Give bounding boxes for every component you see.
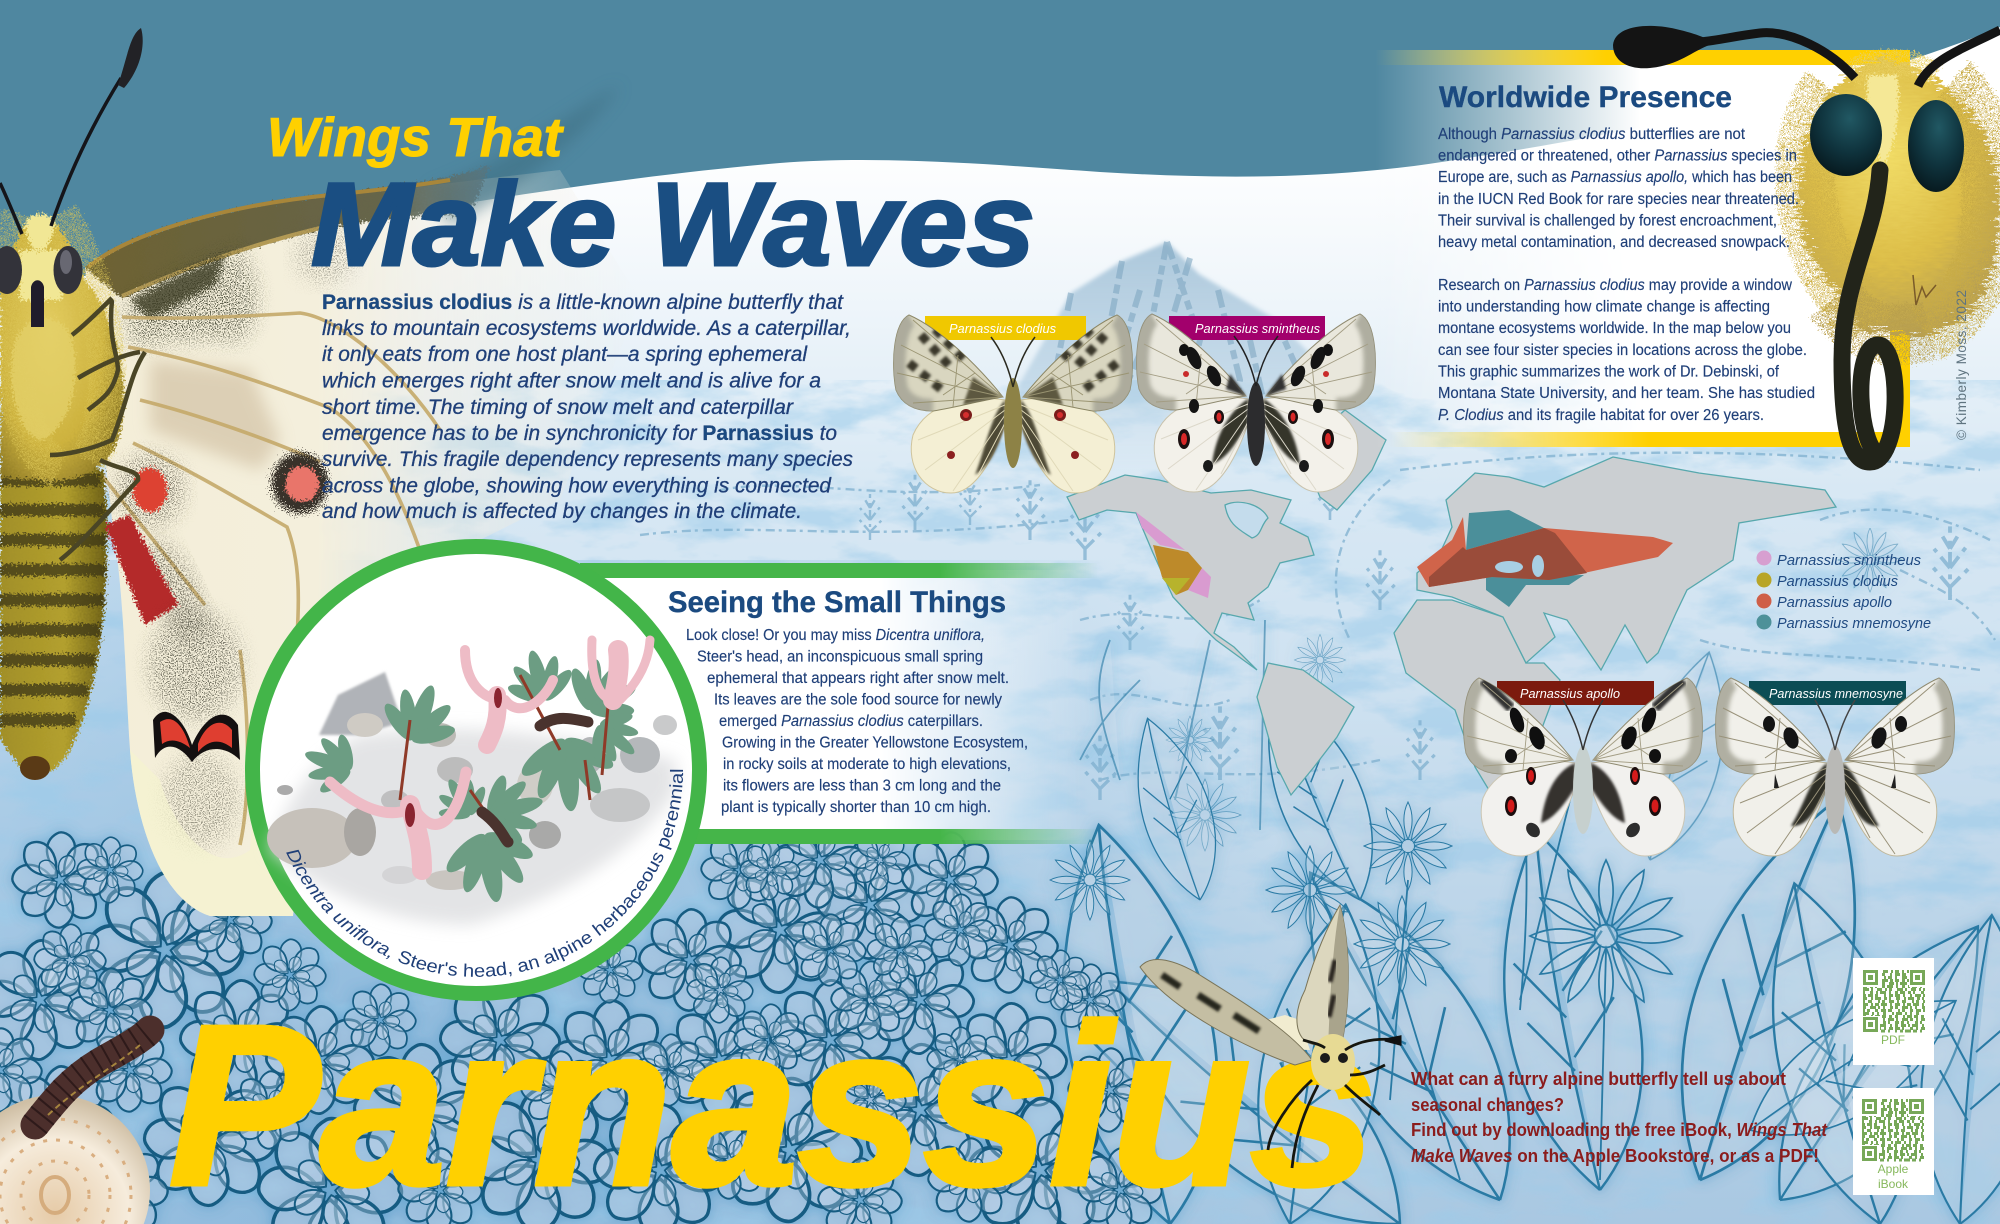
circular caption: Dicentra uniflora, Steer's head, an alpine herbaceous perennial (286, 770, 684, 977)
map legend (1756, 550, 1931, 632)
intro paragraph: emergence has to be in synchronicity for Parnassius to (322, 422, 837, 445)
intro paragraph: Parnassius clodius is a little-known alpine butterfly that (322, 291, 844, 314)
worldwide presence body text: Research on Parnassius clodius may provide a window (1438, 277, 1793, 294)
lower left flower line drawing (0, 812, 1162, 1224)
stems (400, 660, 612, 840)
label text: clodius: Parnassius clodius (949, 321, 1056, 336)
hudson bay (1225, 502, 1268, 538)
caterpillars (482, 718, 588, 842)
eyes (1810, 94, 1882, 176)
worldwide presence body text (1438, 126, 1815, 424)
butterfly: parnassius mnemosyne (1716, 678, 1954, 856)
antennae (0, 28, 143, 234)
intro paragraph: short time. The timing of snow melt and caterpillar (322, 396, 794, 419)
legs (50, 298, 145, 560)
pale upper plants (1080, 528, 1902, 871)
flower throats (405, 688, 502, 827)
call to action text: Make Waves on the Apple Bookstore, or as a PDF! (1411, 1146, 1819, 1166)
antennae (1700, 33, 1855, 78)
butterfly: parnassius clodius (894, 315, 1132, 493)
circle: steer's head illustration (245, 539, 707, 1001)
large butterfly left (0, 28, 640, 916)
qr code: apple ibook: Apple (1878, 1162, 1909, 1176)
leaves (294, 639, 657, 910)
label text: apollo: Parnassius apollo (1520, 686, 1620, 701)
furry butterfly head (1613, 26, 2000, 462)
pink flowers (330, 640, 650, 870)
abdomen (0, 455, 107, 780)
qr code: pdf: PDF (1881, 1033, 1905, 1047)
panel body text: emerged Parnassius clodius caterpillars. (719, 713, 983, 730)
snowy scribbles background (640, 453, 1995, 800)
panel body text: Steer's head, an inconspicuous small spring (697, 648, 983, 666)
africa (1394, 600, 1560, 800)
signature (1913, 275, 1936, 305)
call to action text (1411, 1069, 1828, 1166)
copyright: © Kimberly Moss, 2022 (1954, 290, 1969, 440)
intro paragraph: and how much is affected by changes in the climate. (322, 500, 802, 523)
title: Wings That: Wings That (267, 106, 565, 168)
map legend: Parnassius mnemosyne (1777, 615, 1931, 632)
worldwide presence body text: Although Parnassius clodius butterflies are not (1438, 126, 1746, 143)
worldwide presence body text: in the IUCN Red Book for rare species near threatened. (1438, 191, 1799, 208)
map legend: Parnassius clodius (1777, 573, 1898, 590)
egg and caterpillar bottom left (0, 1030, 150, 1224)
mountain illustration (1000, 242, 1440, 480)
worldwide presence body text: Europe are, such as Parnassius apollo, which has been (1438, 169, 1792, 186)
qr code: apple ibook (1853, 1088, 1934, 1195)
intro paragraph: it only eats from one host plant—a spring ephemeral (322, 343, 808, 366)
qr code: apple ibook: iBook (1878, 1177, 1909, 1191)
panel body text: ephemeral that appears right after snow melt. (707, 670, 1009, 687)
butterfly: parnassius smintheus (1137, 314, 1375, 492)
qr code: pdf (1853, 958, 1934, 1065)
wings (85, 170, 640, 916)
red wing marks (105, 454, 218, 649)
panel body text: its flowers are less than 3 cm long and the (723, 778, 1001, 794)
species ranges on the map (1136, 510, 1673, 607)
eye spot (272, 453, 328, 513)
worldwide presence body text: can see four sister species in locations across the globe. (1438, 342, 1807, 359)
intro paragraph: across the globe, showing how everything is connected (322, 474, 832, 498)
panel body text: Its leaves are the sole food source for newly (714, 692, 1002, 708)
heading: worldwide presence: Worldwide Presence (1439, 81, 1732, 114)
worldwide presence body text: Their survival is challenged by forest encroachment, (1438, 212, 1777, 230)
wing veins (100, 313, 440, 845)
label text: mnemosyne: Parnassius mnemosyne (1769, 686, 1903, 701)
proboscis (1842, 170, 1895, 462)
speckled dark patches (125, 250, 256, 345)
worldwide presence body text: P. Clodius and its fragile habitat for over 26 years. (1438, 407, 1764, 424)
map legend: Parnassius apollo (1777, 594, 1892, 611)
title: Make Waves: Make Waves (311, 159, 1035, 291)
map legend: Parnassius smintheus (1777, 552, 1921, 569)
panel body text: plant is typically shorter than 10 cm high. (721, 799, 991, 816)
label text: smintheus: Parnassius smintheus (1195, 321, 1320, 336)
panel body text: Growing in the Greater Yellowstone Ecosystem, (722, 734, 1028, 752)
intro paragraph: survive. This fragile dependency represents many species (322, 448, 853, 471)
greenland (1300, 410, 1386, 510)
fur hair fringe (1806, 62, 1992, 335)
south america (1257, 663, 1354, 795)
heading: seeing the small things: Seeing the Small Things (668, 586, 1006, 619)
rocks (267, 672, 677, 925)
call to action text: Find out by downloading the free iBook, Wings That (1411, 1120, 1828, 1140)
call to action text: What can a furry alpine butterfly tell us about (1411, 1069, 1786, 1089)
panel body text: in rocky soils at moderate to high elevations, (723, 756, 1011, 773)
worldwide presence body text: endangered or threatened, other Parnassius species in (1438, 148, 1797, 164)
worldwide presence body text: This graphic summarizes the work of Dr. Debinski, of (1438, 364, 1780, 380)
call to action text: seasonal changes? (1411, 1095, 1564, 1115)
lobe shading and crescents (130, 610, 300, 916)
worldwide presence body text: montane ecosystems worldwide. In the map below you (1438, 320, 1791, 337)
eurasia (1417, 457, 1836, 670)
eyes (0, 246, 82, 327)
panel body text: Look close! Or you may miss Dicentra uniflora, (686, 627, 985, 644)
intro paragraph: which emerges right after snow melt and is alive for a (322, 370, 821, 392)
worldwide presence body text: into understanding how climate change is affecting (1438, 299, 1770, 316)
world map (1067, 410, 1836, 800)
north america (1067, 475, 1314, 670)
main lower plants (1038, 671, 2000, 1224)
leading edge band (85, 165, 490, 298)
flying butterfly (1140, 905, 1400, 1168)
fur (1798, 58, 2000, 337)
panel: seeing the small things (560, 563, 1100, 844)
panel body text (686, 627, 1028, 816)
intro paragraph (322, 291, 853, 523)
butterfly: parnassius apollo (1464, 678, 1702, 856)
lower right plants line drawing (1038, 528, 2000, 1224)
top teal wave (0, 0, 2000, 295)
thorax (0, 213, 124, 481)
faded wing tip (430, 85, 620, 225)
intro paragraph: links to mountain ecosystems worldwide. As a caterpillar, (322, 317, 851, 340)
worldwide presence body text: Montana State University, and her team. She has studied (1438, 385, 1815, 402)
panel: worldwide presence (1375, 50, 1910, 447)
worldwide presence body text: heavy metal contamination, and decreased snowpack. (1438, 234, 1790, 251)
